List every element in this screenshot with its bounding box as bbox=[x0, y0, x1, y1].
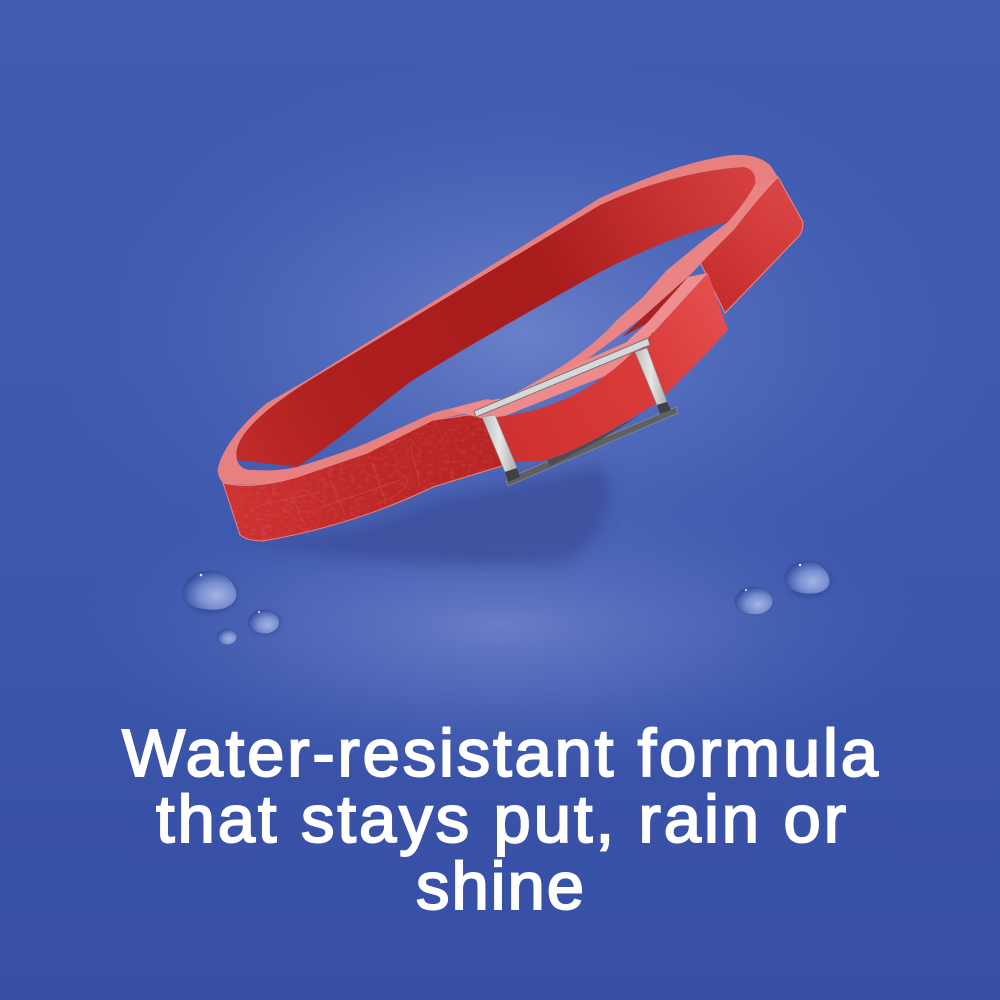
band shadow bbox=[238, 465, 610, 566]
band strap top surface bbox=[450, 332, 660, 420]
icon: red rubber band with buckle bbox=[218, 155, 803, 541]
water drops left bbox=[183, 571, 281, 645]
band left outer face bbox=[223, 412, 515, 541]
band right outer face bbox=[700, 177, 803, 313]
band inner face bbox=[236, 167, 755, 467]
water drops right bbox=[735, 561, 832, 615]
buckle bottom bar bbox=[506, 407, 678, 486]
band strap section bbox=[495, 273, 728, 462]
buckle bbox=[474, 338, 678, 486]
band leather creases bbox=[260, 445, 420, 525]
buckle right post bbox=[635, 348, 667, 405]
buckle left post bbox=[482, 415, 517, 472]
drop right small bbox=[735, 587, 773, 615]
heading: shine bbox=[416, 849, 584, 924]
band strap tab top bbox=[620, 273, 708, 348]
heading: that stays put, rain or bbox=[156, 782, 846, 857]
buckle clips bbox=[505, 402, 671, 482]
band dark slit by tab bbox=[622, 277, 688, 337]
band descending rim bbox=[535, 177, 778, 382]
buckle top bar bbox=[474, 338, 650, 417]
buckle strap edge bbox=[547, 415, 640, 466]
drop large bbox=[183, 571, 238, 614]
drop small bbox=[217, 629, 237, 645]
drop medium bbox=[248, 610, 281, 635]
band top rim bbox=[218, 155, 778, 485]
heading: Water-resistant formula bbox=[122, 716, 879, 791]
drop right large bbox=[785, 561, 832, 598]
